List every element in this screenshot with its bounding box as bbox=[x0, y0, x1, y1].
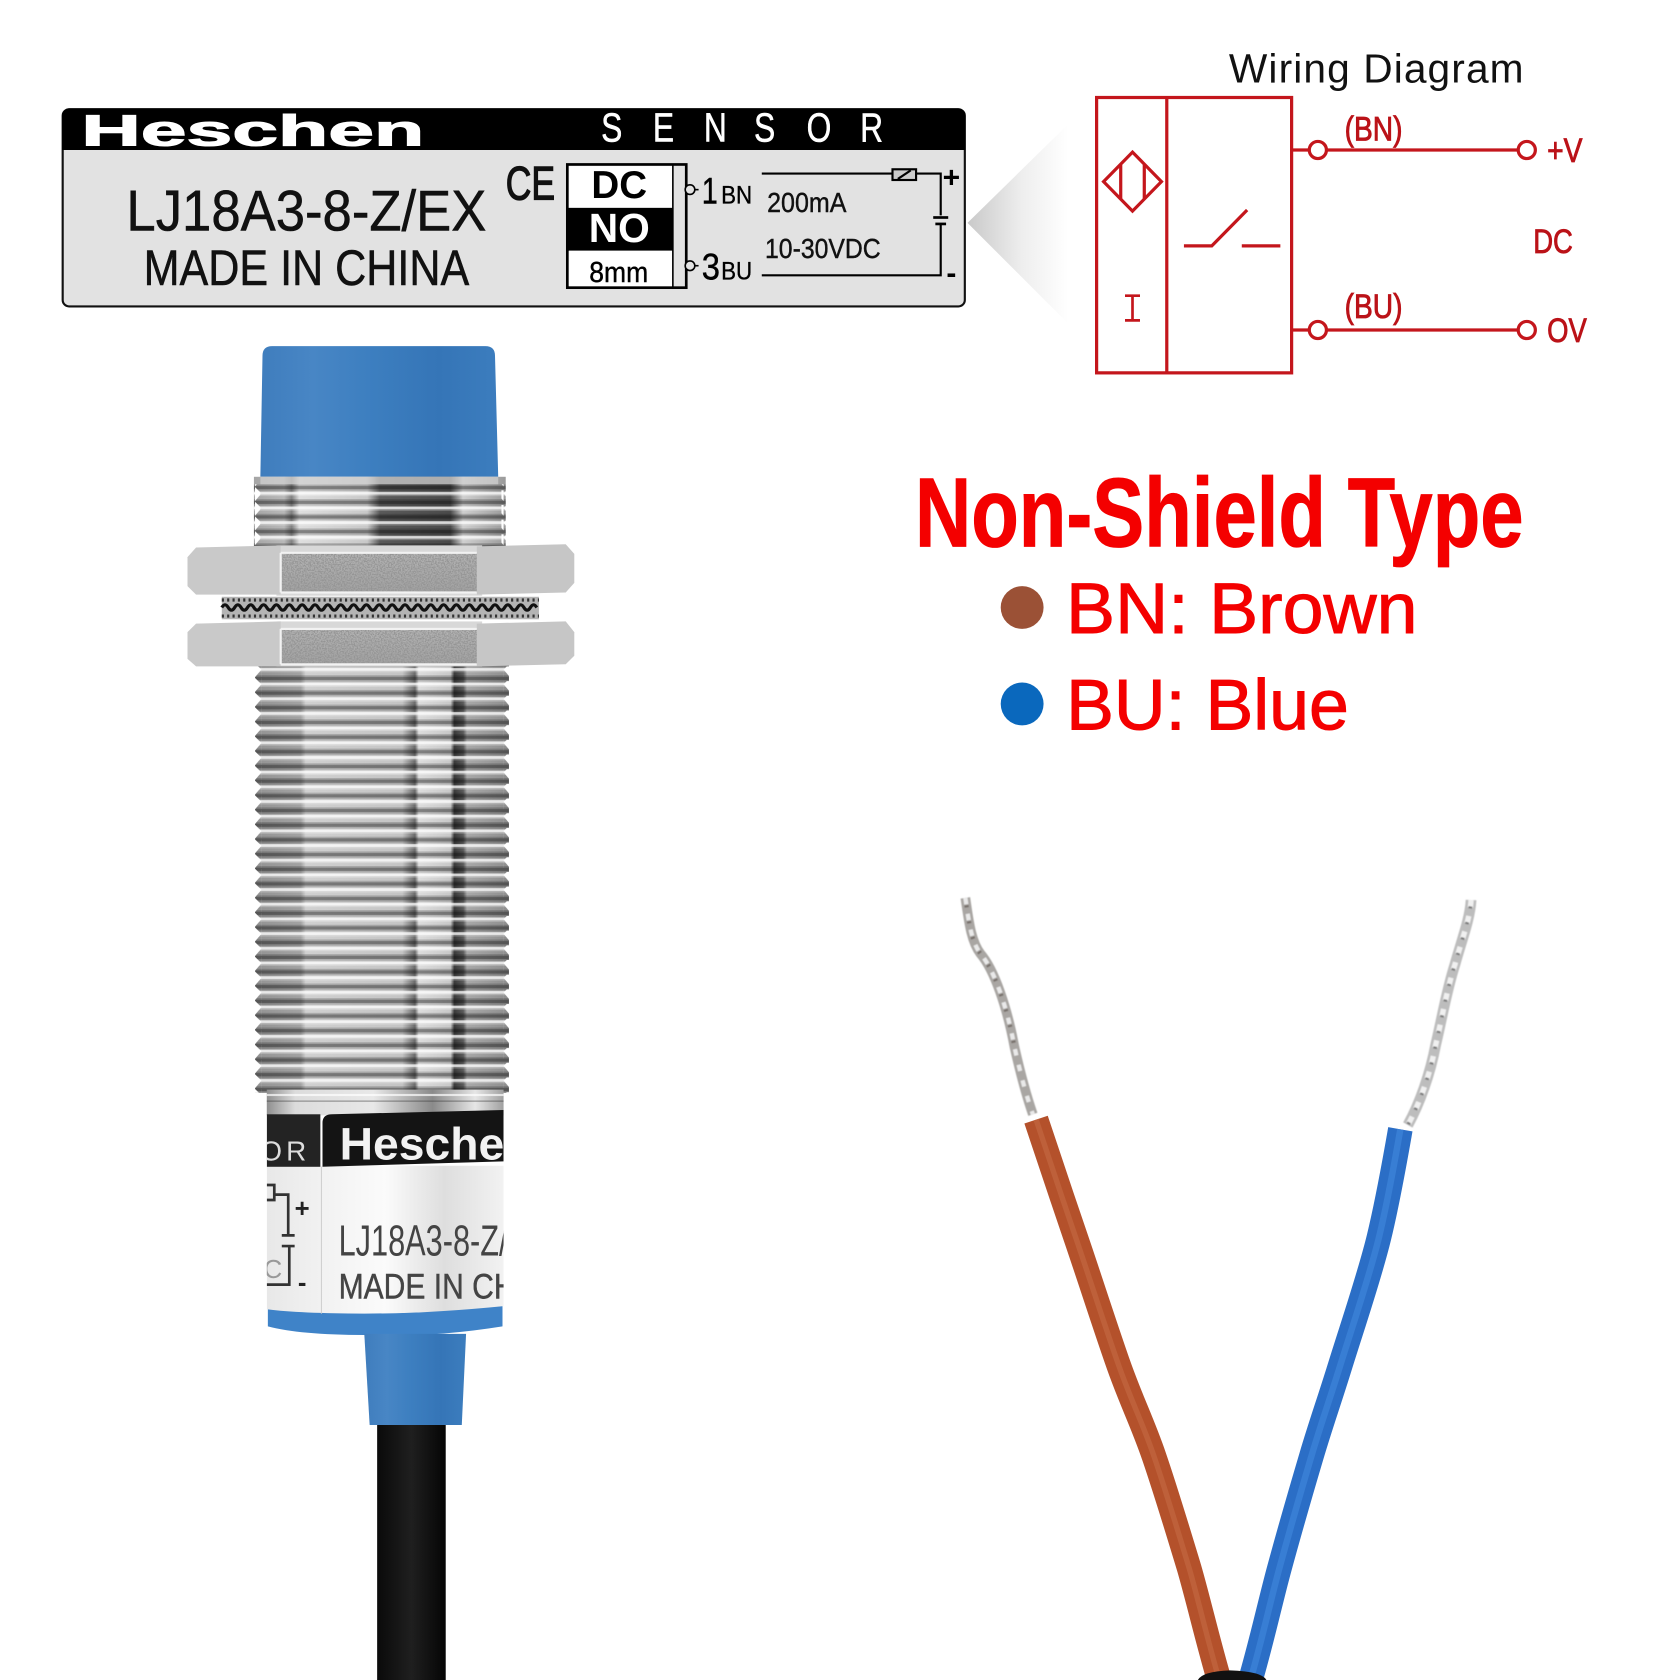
sensor block bbox=[1097, 98, 1292, 373]
upper nut bbox=[188, 544, 574, 596]
brand: Heschen: Heschen bbox=[81, 107, 424, 156]
icon: normally open switch bbox=[1184, 210, 1280, 246]
positive line bbox=[1292, 141, 1535, 159]
terminal 3 BU: BU bbox=[721, 259, 752, 286]
callout wedge bbox=[968, 116, 1077, 332]
circuit on sensor bbox=[267, 1185, 295, 1285]
heading: Non-Shield Type: Non-Shield Type bbox=[915, 457, 1524, 567]
label header band bbox=[62, 108, 965, 150]
label circuit bbox=[762, 169, 948, 275]
label body bbox=[63, 109, 965, 306]
spec box: NO bbox=[589, 205, 650, 251]
icon: current symbol bbox=[1125, 296, 1140, 320]
label black band bbox=[267, 1114, 320, 1167]
wiring labels: OV bbox=[1547, 312, 1587, 350]
upper threads bbox=[254, 477, 508, 548]
legend: blue wire: BU: Blue bbox=[1066, 666, 1349, 746]
wiring diagram title: Wiring Diagram bbox=[1229, 46, 1524, 92]
brand on sensor: Heschen bbox=[340, 1118, 532, 1169]
wiring labels: DC bbox=[1533, 223, 1573, 261]
blue strain relief bbox=[364, 1334, 466, 1425]
brown insulation bbox=[1036, 1120, 1221, 1680]
wrap-around label bbox=[266, 1110, 504, 1314]
wiring labels: +V bbox=[1547, 132, 1583, 170]
letter C on sensor: C bbox=[264, 1256, 282, 1284]
icon: inductive sensor diamond bbox=[1104, 152, 1161, 211]
blue highlight bbox=[1248, 1129, 1400, 1680]
made in china: MADE IN CHINA bbox=[144, 239, 470, 296]
wire: blue bbox=[1248, 900, 1471, 1680]
silver collar bbox=[267, 1090, 504, 1115]
made in china on sensor: MADE IN CHINA bbox=[339, 1268, 566, 1307]
main threaded barrel bbox=[255, 662, 510, 1093]
legend: brown wire: BN: Brown bbox=[1066, 569, 1418, 649]
wiring labels: (BU) bbox=[1345, 288, 1403, 326]
wrap-around label: - bbox=[298, 1269, 306, 1297]
cable bbox=[377, 1420, 446, 1680]
plus and minus: + bbox=[943, 162, 960, 195]
terminal 3 BU: 3 bbox=[702, 246, 720, 288]
CE mark: CE bbox=[506, 156, 555, 209]
label paper bbox=[267, 1166, 504, 1314]
terminal 1 BN: BN bbox=[721, 183, 752, 210]
sensor body bbox=[188, 346, 574, 1425]
brown highlight bbox=[1036, 1120, 1221, 1680]
spec box: 8mm bbox=[589, 257, 648, 289]
label seam bbox=[320, 1166, 322, 1314]
wiring diagram bbox=[1097, 98, 1535, 373]
strand: blue side bbox=[1408, 900, 1471, 1125]
plus and minus bbox=[943, 162, 960, 290]
blue sensing cap bbox=[260, 346, 498, 477]
wire: brown bbox=[965, 898, 1221, 1680]
wiring labels: (BN) bbox=[1345, 110, 1403, 148]
voltage rating: 10-30VDC bbox=[765, 233, 881, 264]
terminal 1 BN bbox=[685, 170, 752, 212]
nameplate label bbox=[62, 105, 965, 306]
model number: LJ18A3-8-Z/EX bbox=[126, 179, 486, 243]
plus and minus: - bbox=[946, 257, 956, 290]
cable jacket end bbox=[1198, 1670, 1266, 1680]
negative line bbox=[1292, 321, 1535, 339]
spec box: DC bbox=[591, 164, 647, 207]
spec box bbox=[567, 164, 686, 289]
word: SENSOR: SENSOR bbox=[601, 105, 883, 150]
current rating: 200mA bbox=[767, 187, 847, 218]
serrated washers bbox=[222, 597, 539, 619]
signs on sensor: + bbox=[295, 1195, 310, 1223]
lower nut bbox=[188, 621, 574, 666]
letters on sensor: OR bbox=[260, 1135, 306, 1166]
blue insulation bbox=[1248, 1129, 1400, 1680]
strand: brown side bbox=[965, 898, 1033, 1114]
terminal 1 BN: 1 bbox=[702, 170, 718, 212]
wiring labels bbox=[1345, 110, 1587, 350]
model on sensor: LJ18A3-8-Z/EX bbox=[339, 1217, 549, 1266]
terminal 3 BU bbox=[685, 246, 752, 288]
blue base bbox=[268, 1302, 502, 1336]
